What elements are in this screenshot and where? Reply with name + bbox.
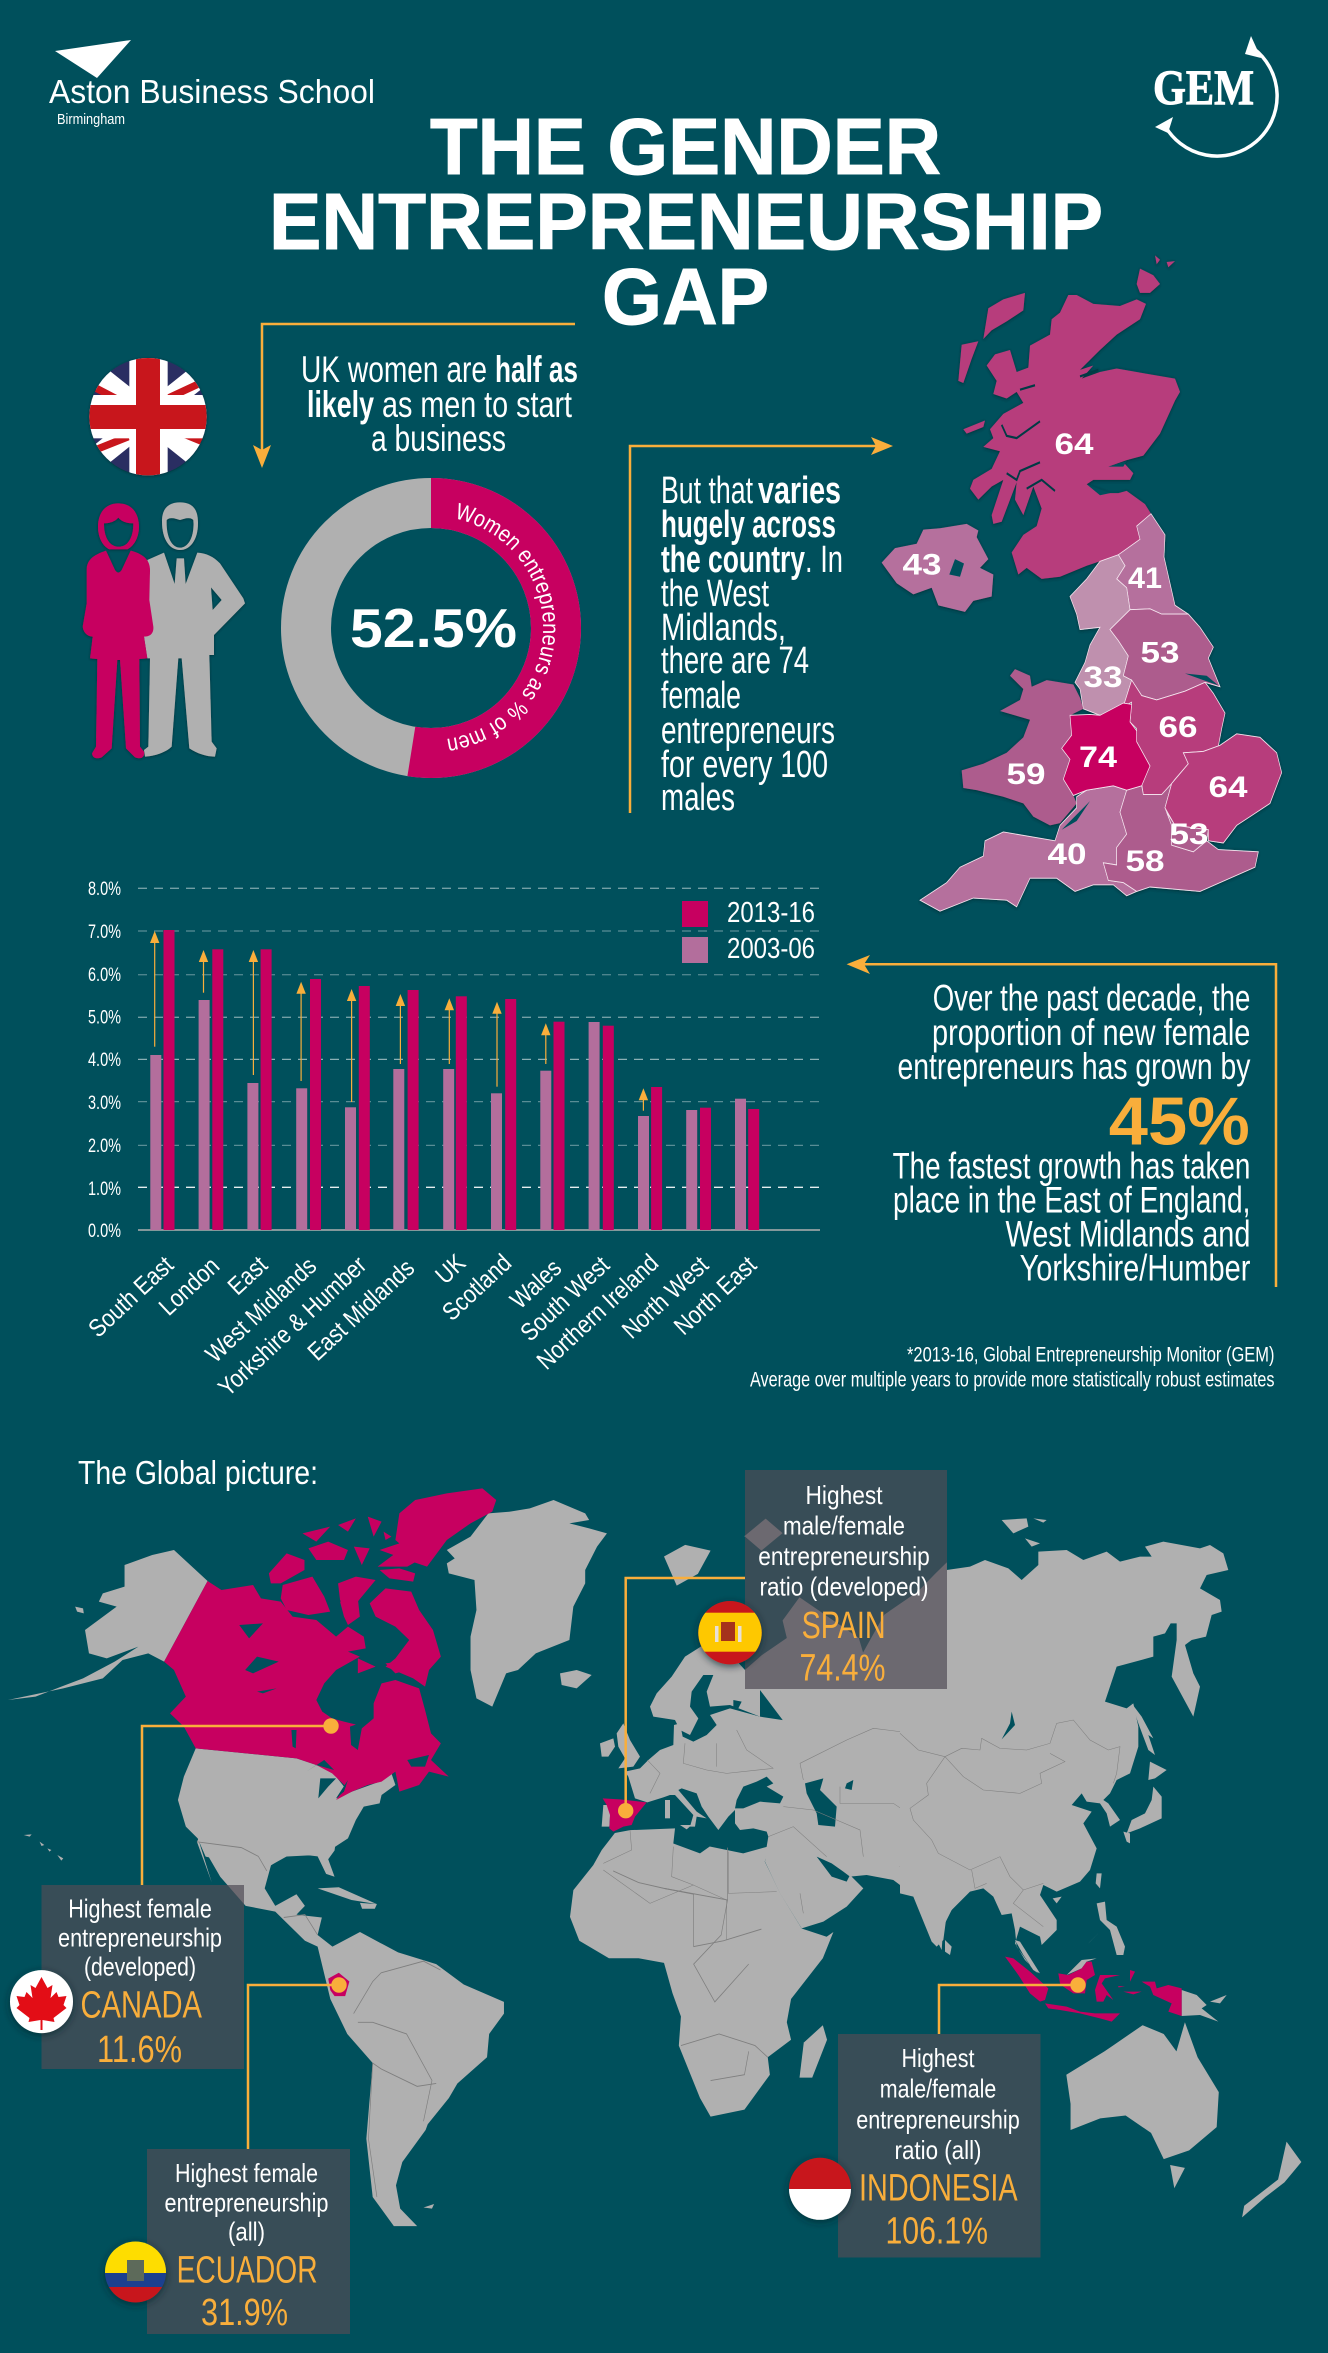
icon: woman <box>83 503 153 758</box>
callout: Indonesia: INDONESIA <box>859 2168 1018 2210</box>
icon: Ecuador flag <box>104 2240 168 2303</box>
map: Europe and Middle East <box>560 1645 960 1950</box>
map: Latin America <box>197 1813 504 2226</box>
text: varies across the country: the West <box>661 573 769 615</box>
map: UK regions <box>882 255 1282 911</box>
callout: Spain: 74.4% <box>800 1648 886 1690</box>
title <box>269 102 1103 341</box>
axis labels: 6.0% <box>88 965 121 986</box>
callout: Canada: CANADA <box>80 1985 202 2027</box>
map: Canada highlight <box>164 1488 496 1800</box>
logo: GEM <box>1153 36 1277 156</box>
map region: East <box>1165 734 1282 843</box>
legend: 2003-06 <box>727 933 815 965</box>
map values: 33 <box>1084 661 1122 694</box>
map region: West Midlands <box>1062 703 1150 795</box>
text: varies across the country <box>661 470 843 819</box>
callout: Ecuador: (all) <box>228 2217 265 2247</box>
map values: 43 <box>902 548 942 582</box>
logo: Aston Business School <box>49 40 375 128</box>
map region: Northern Ireland <box>882 524 993 612</box>
callout: Canada: (developed) <box>84 1952 196 1982</box>
text: varies across the country: there are 74 <box>661 640 809 682</box>
axis labels: 2.0% <box>88 1136 121 1157</box>
map: Africa, western Asia and Australia <box>570 1519 1301 2217</box>
axis labels: 3.0% <box>88 1093 121 1114</box>
map: Spain highlight <box>603 1798 647 1832</box>
growth arrows <box>150 931 648 1111</box>
text: varies across the country: males <box>661 777 735 819</box>
callout: Ecuador: entrepreneurship <box>164 2188 328 2218</box>
callout: Indonesia: entrepreneurship <box>856 2104 1020 2134</box>
map values: 40 <box>1048 838 1086 871</box>
region labels: London <box>153 1252 225 1321</box>
map region: London <box>1167 812 1208 852</box>
text: varies across the country: But that <box>661 470 753 512</box>
axis labels: 0.0% <box>88 1221 121 1242</box>
text: UK women half as likely: a business <box>371 418 506 459</box>
region labels: West Midlands <box>200 1252 322 1368</box>
bars 2013-16 <box>164 930 759 1230</box>
footnote <box>750 1344 1274 1392</box>
logo: Aston Business School: Birmingham <box>57 111 125 128</box>
callout: Canada: Highest female <box>68 1894 212 1924</box>
region labels: Northern Ireland <box>531 1249 664 1375</box>
text: 45% growth callout: proportion of new female <box>932 1012 1250 1053</box>
callout: Spain: male/female <box>783 1510 905 1540</box>
region labels: North East <box>668 1250 762 1340</box>
legend <box>682 897 815 965</box>
callout: Spain: entrepreneurship <box>758 1541 930 1571</box>
map values: 64 <box>1208 771 1248 804</box>
text: UK women half as likely: UK women are <box>301 349 487 390</box>
heading: The Global picture: The Global picture: <box>78 1454 318 1491</box>
callout: Indonesia: male/female <box>880 2073 996 2103</box>
text: UK women half as likely: as men to start <box>382 384 573 425</box>
map: Indonesia highlight and neighbours <box>1005 1940 1227 2022</box>
map values: 58 <box>1126 845 1164 878</box>
world map <box>8 1488 1301 2226</box>
callout: Spain: SPAIN <box>802 1605 886 1647</box>
bars 2003-06 <box>150 1000 746 1230</box>
map region: South West <box>920 786 1137 911</box>
logo: GEM: GEM <box>1153 59 1254 115</box>
axis labels: 5.0% <box>88 1008 121 1028</box>
title: ENTREPRENEURSHIP <box>269 177 1103 266</box>
callout: Ecuador: ECUADOR <box>177 2250 318 2292</box>
text: 45% growth callout: West Midlands and <box>1006 1214 1250 1255</box>
text: varies across the country: hugely across <box>661 504 836 546</box>
bar chart: regional female entrepreneurship <box>83 879 820 1401</box>
region labels: Yorkshire & Humber <box>213 1250 372 1401</box>
title: THE GENDER <box>430 102 941 191</box>
callout: Ecuador: 31.9% <box>201 2292 288 2334</box>
chart: donut 52.5% <box>281 478 581 778</box>
map values: 53 <box>1170 818 1208 851</box>
region labels: UK <box>430 1248 471 1289</box>
logo: Aston Business School: Aston Business School <box>49 73 375 110</box>
callout: Indonesia <box>788 1977 1086 2258</box>
text: UK women half as likely <box>301 349 578 459</box>
text: varies across the country: female <box>661 675 741 717</box>
map region: Yorkshire and Humber <box>1110 609 1220 700</box>
arrow: text to UK map <box>630 437 893 813</box>
map values: 59 <box>1006 758 1046 791</box>
region labels: South East <box>83 1250 179 1343</box>
axis labels <box>88 879 121 1242</box>
icon: Indonesia flag <box>788 2157 852 2221</box>
text: UK women half as likely: likely <box>307 384 374 425</box>
text: 45% growth callout: Yorkshire/Humber <box>1020 1248 1250 1289</box>
chart: donut 52.5%: 52.5% <box>350 597 517 659</box>
callout: Ecuador <box>104 1977 350 2334</box>
callout: Indonesia: ratio (all) <box>894 2135 982 2165</box>
text: varies across the country: Midlands, <box>661 607 786 649</box>
region labels: East <box>222 1250 273 1300</box>
arrow: text to chart <box>847 955 1276 1287</box>
title: GAP <box>602 252 769 341</box>
text: UK women half as likely: half as <box>495 349 578 390</box>
axis labels: 7.0% <box>88 922 121 943</box>
map: Ecuador highlight <box>328 1973 349 1996</box>
text: varies across the country: . In <box>805 539 843 581</box>
text: 45% growth callout <box>893 978 1251 1289</box>
icon: man and woman figures <box>83 502 245 758</box>
region labels: North West <box>616 1250 714 1344</box>
text: varies across the country: entrepreneurs <box>661 710 835 752</box>
map region: North East <box>1117 514 1188 614</box>
map values: 66 <box>1158 711 1198 744</box>
legend: 2013-16 <box>727 897 815 929</box>
callout: Ecuador: Highest female <box>175 2158 318 2188</box>
text: varies across the country: varies <box>758 470 841 512</box>
region labels: East Midlands <box>302 1254 420 1366</box>
callout: Spain: ratio (developed) <box>760 1572 928 1602</box>
region labels <box>83 1248 762 1401</box>
icon: Canada flag <box>10 1970 73 2033</box>
arrow: title to UK women <box>253 324 575 468</box>
map region: Scotland <box>958 255 1180 579</box>
chart: donut 52.5%: Women entrepreneurs as % of men <box>447 502 556 750</box>
map region: North West <box>1070 555 1132 715</box>
axis labels: 8.0% <box>88 879 121 900</box>
callout: Canada: entrepreneurship <box>58 1923 222 1953</box>
callout: Canada <box>10 1718 339 2071</box>
axis labels: 4.0% <box>88 1050 121 1071</box>
axis labels: 1.0% <box>88 1179 121 1200</box>
map region: Wales <box>962 669 1083 825</box>
icon: Spain flag <box>698 1600 762 1666</box>
callout: Spain: Highest <box>806 1480 883 1510</box>
map region: South East <box>1103 784 1258 891</box>
icon: man <box>144 502 245 757</box>
map: North America and Greenland <box>8 1488 607 1867</box>
text: 45% growth callout: 45% <box>1109 1083 1250 1159</box>
map: East Asia <box>900 1518 1228 1973</box>
region labels: Scotland <box>436 1249 517 1326</box>
icon: UK flag <box>87 357 210 477</box>
map values: 53 <box>1140 636 1180 670</box>
region labels: South West <box>515 1250 615 1346</box>
region labels: Wales <box>505 1254 567 1314</box>
map values <box>902 428 1248 878</box>
map values: 41 <box>1128 562 1162 595</box>
callout: Canada: 11.6% <box>97 2029 182 2071</box>
map values: 64 <box>1054 428 1094 461</box>
callout: Spain <box>618 1470 947 1818</box>
text: varies across the country: for every 100 <box>661 744 828 786</box>
map region: East Midlands <box>1123 680 1225 795</box>
callout: Indonesia: Highest <box>902 2043 975 2073</box>
callout: Indonesia: 106.1% <box>886 2211 988 2253</box>
map values: 74 <box>1079 741 1117 774</box>
text: varies across the country: the country <box>661 539 805 581</box>
